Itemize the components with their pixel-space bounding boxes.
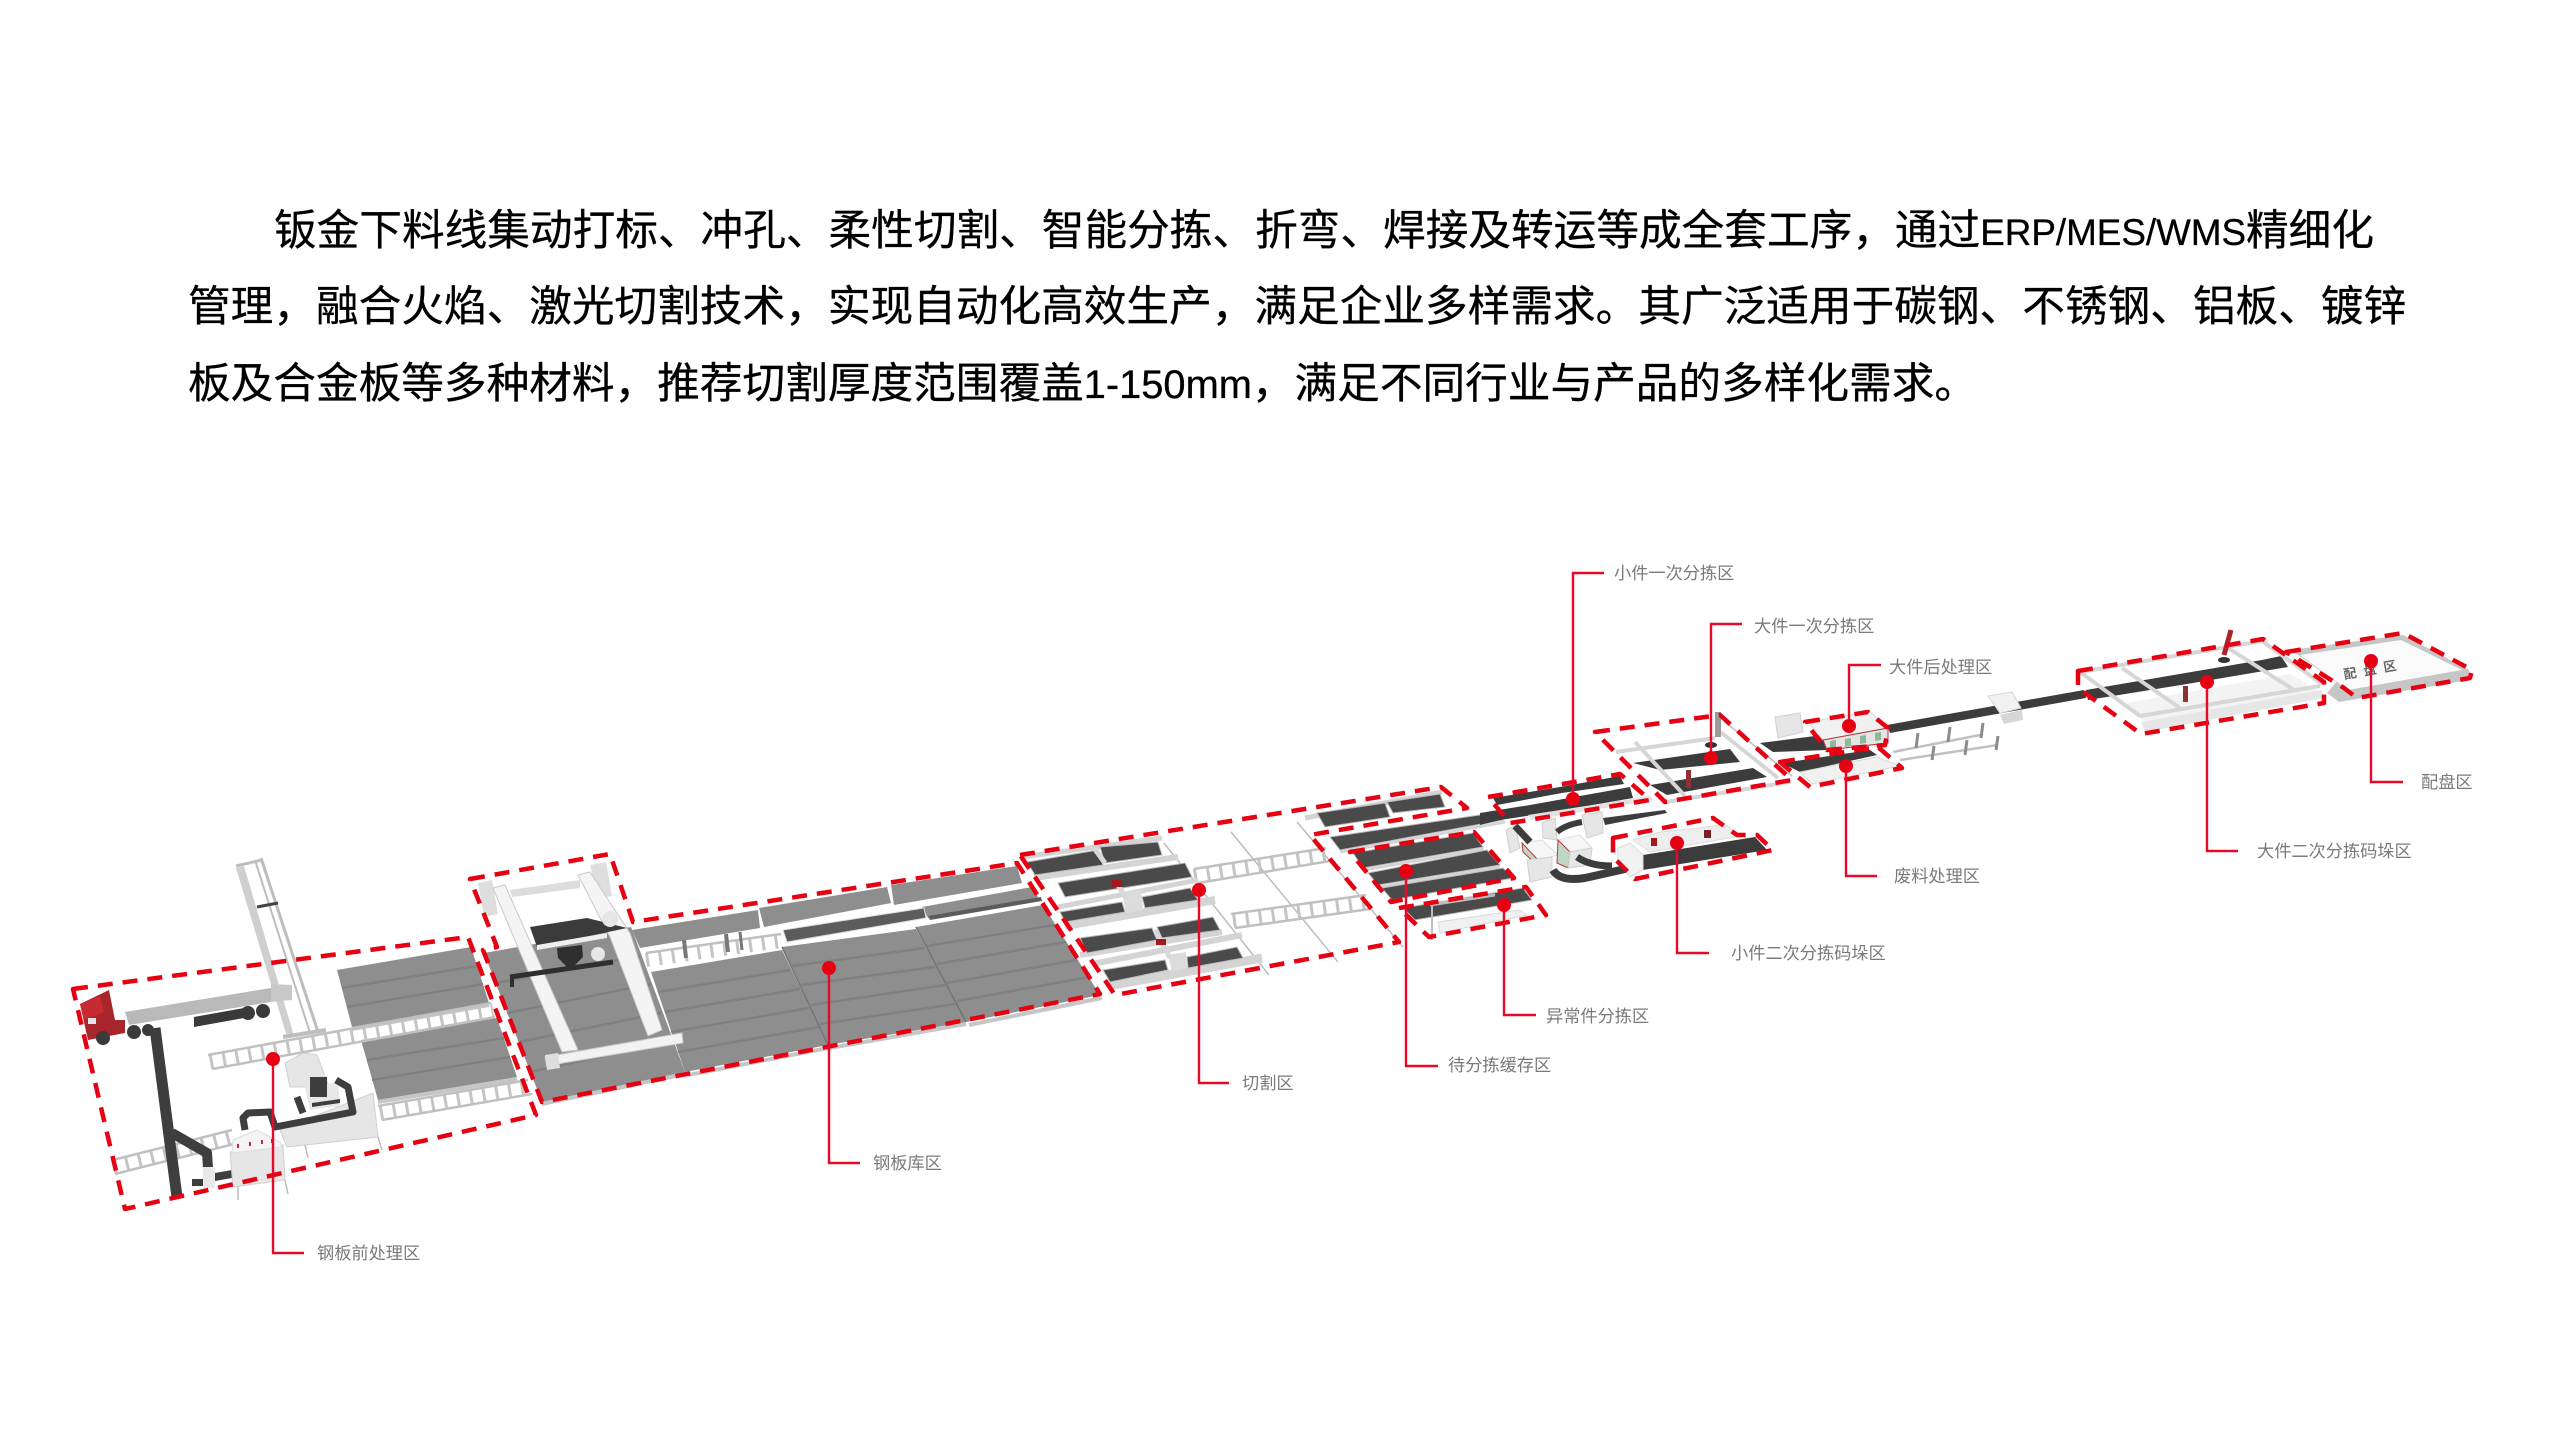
intro line 1: 钣金下料线集动打标、冲孔、柔性切割、智能分拣、折弯、焊接及转运等成全套工序，通过ERP/MES/WMS精细化 <box>274 207 2374 255</box>
cutting area equipment <box>1022 792 1532 986</box>
top plate row <box>632 866 1039 948</box>
guide rails thin <box>1164 822 1403 975</box>
large post-process cabin <box>1808 712 1888 750</box>
callout: 大件一次分拣区: 大件一次分拣区 <box>1754 616 1874 636</box>
pallet area floor <box>2291 635 2469 702</box>
callout: 大件后处理区: 大件后处理区 <box>1889 657 1992 677</box>
small parts second sort station <box>1618 824 1767 877</box>
robots roller zone <box>1893 692 2023 760</box>
roller conveyor right <box>378 1080 532 1120</box>
roller conveyor upper <box>1194 848 1330 883</box>
upper sorting tables <box>1305 792 1505 852</box>
cutting tables <box>1027 842 1243 982</box>
callout: 钢板前处理区 <box>266 1052 420 1263</box>
callout: 大件二次分拣码垛区: 大件二次分拣码垛区 <box>2257 841 2412 861</box>
callout: 待分拣缓存区 <box>1399 864 1551 1075</box>
dashed zone: large parts first sort <box>1595 715 1792 802</box>
roller conveyor lower left <box>113 1130 234 1174</box>
plate stack A <box>337 947 489 1029</box>
dashed zone: small parts first sort <box>1488 774 1650 823</box>
dark roller section <box>783 897 1042 942</box>
cutting gantries <box>1094 848 1187 972</box>
shot blasting machine <box>230 1053 382 1200</box>
callout: 废料处理区: 废料处理区 <box>1894 866 1980 886</box>
plate field under crane <box>484 927 685 1104</box>
intro line 2: 管理，融合火焰、激光切割技术，实现自动化高效生产，满足企业多样需求。其广泛适用于碳钢、不锈钢、铝板、镀锌 <box>188 283 2406 331</box>
callout: 配盘区: 配盘区 <box>2421 772 2473 792</box>
roller conveyor lower <box>1231 895 1370 928</box>
callout: 大件一次分拣区 <box>1704 616 1874 765</box>
callout: 钢板库区: 钢板库区 <box>873 1153 942 1173</box>
dashed zone: waiting buffer <box>1350 832 1514 902</box>
dashed zone: large parts second sort <box>2078 639 2324 734</box>
truck trailer <box>125 984 292 1027</box>
callout: 钢板库区 <box>822 961 942 1173</box>
gantry tower <box>236 858 326 1037</box>
intro line 3: 板及合金板等多种材料，推荐切割厚度范围覆盖1-150mm，满足不同行业与产品的多样化需求。 <box>188 360 1977 408</box>
callout: 大件后处理区 <box>1842 657 1992 733</box>
buffer tables <box>1353 833 1513 900</box>
dashed zone: abnormal parts <box>1399 887 1546 937</box>
callout: 异常件分拣区: 异常件分拣区 <box>1546 1006 1649 1026</box>
central dust cabinets <box>1506 812 1603 882</box>
sorting and post-process equipment <box>1480 630 2469 882</box>
callout: 小件二次分拣码垛区 <box>1670 836 1886 963</box>
plate stack B <box>361 1018 517 1102</box>
steel plate warehouse <box>478 862 1102 1104</box>
overhead crane <box>478 862 683 1070</box>
plate field 2 <box>651 950 828 1075</box>
dashed zone: pallet <box>2286 633 2472 698</box>
large parts second gantry <box>2080 630 2324 732</box>
scrap belt <box>1782 750 1900 784</box>
truck cab <box>80 990 154 1045</box>
plate field 4 <box>916 905 1102 1025</box>
callout: 配盘区 <box>2364 654 2473 792</box>
callout: 钢板前处理区: 钢板前处理区 <box>317 1243 420 1263</box>
dashed zone: cutting <box>1020 787 1467 995</box>
callout: 小件二次分拣码垛区: 小件二次分拣码垛区 <box>1731 943 1886 963</box>
pallet area floor text: 配 盘 区 <box>2342 658 2398 682</box>
dashed zone: steel plate pre-treatment <box>73 937 536 1209</box>
dark exhaust ducts <box>155 1028 232 1197</box>
callout: 大件二次分拣码垛区 <box>2200 675 2412 861</box>
callout: 切割区 <box>1192 883 1294 1093</box>
long output belt <box>1887 656 2288 733</box>
small parts first sort belts <box>1480 776 1667 825</box>
abnormal parts table <box>1403 888 1532 940</box>
dashed zone: small parts second sort <box>1613 818 1773 879</box>
steel plate pre-treatment equipment <box>80 858 532 1200</box>
curved conveyors <box>1515 822 1625 879</box>
dashed zone: large post-process <box>1805 712 1888 750</box>
loading conveyor <box>646 932 781 960</box>
callout: 异常件分拣区 <box>1497 898 1649 1026</box>
belt section behind post-process <box>1760 713 1827 752</box>
intro text block <box>188 207 2406 408</box>
dashed zone: steel plate warehouse <box>470 854 1100 1102</box>
callout: 小件一次分拣区: 小件一次分拣区 <box>1614 563 1734 583</box>
callout: 小件一次分拣区 <box>1566 563 1734 806</box>
dashed zone: scrap <box>1780 747 1902 787</box>
callout: 切割区: 切割区 <box>1242 1073 1294 1093</box>
plate field 3 <box>782 929 966 1048</box>
callout: 废料处理区 <box>1839 759 1980 886</box>
large parts first sort station <box>1616 712 1792 802</box>
callout: 待分拣缓存区: 待分拣缓存区 <box>1448 1055 1551 1075</box>
roller conveyor upper <box>208 1003 495 1069</box>
cutting table rails <box>1022 838 1262 986</box>
